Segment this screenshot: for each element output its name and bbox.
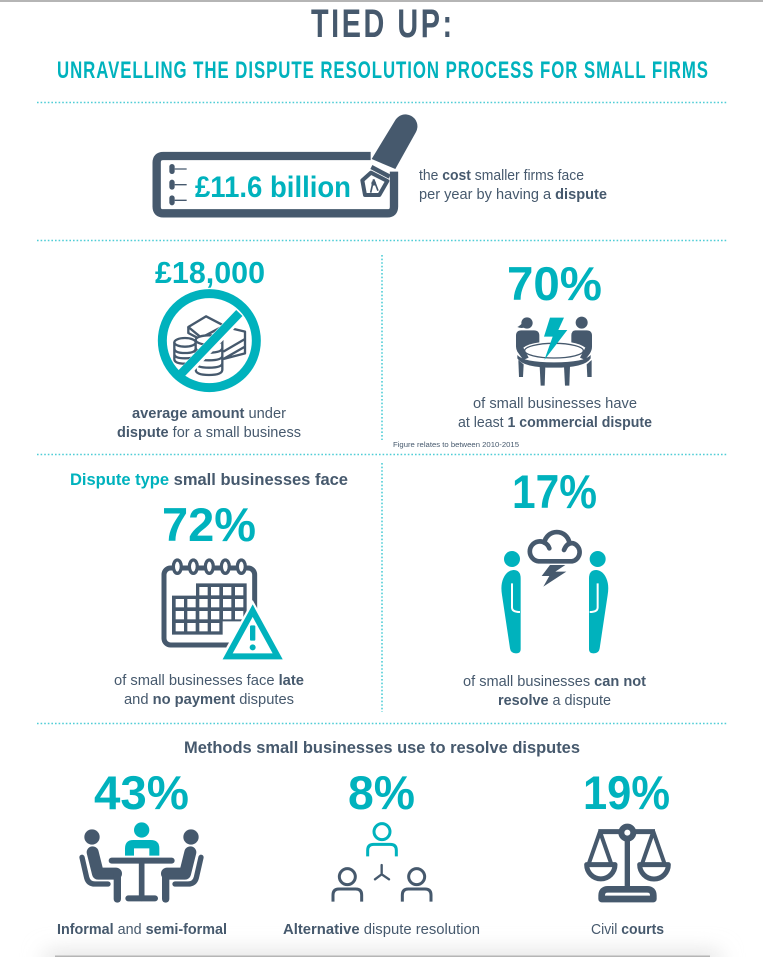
icon: cheque with fountain pen (157, 114, 417, 213)
icon: calendar with warning triangle (164, 560, 287, 662)
stat: 17%: 17% (512, 465, 597, 518)
text: cost description: the cost smaller firms face (419, 167, 584, 184)
text: average amount: dispute for a small business (117, 424, 301, 441)
stat: 19%: 19% (583, 766, 670, 819)
subtitle: UNRAVELLING THE DISPUTE RESOLUTION PROCESS FOR SMALL FIRMS (57, 57, 708, 84)
text: late payment (114, 672, 304, 708)
text: cannot resolve: of small businesses can not (463, 673, 646, 690)
text: commercial dispute (458, 395, 652, 431)
text: late payment: and no payment disputes (124, 691, 294, 708)
heading: methods: Methods small businesses use to resolve disputes (184, 739, 580, 757)
label: civil courts: Civil courts (591, 921, 664, 938)
icon: crossed-out money (162, 294, 256, 388)
icon: two people under a storm cloud (501, 532, 608, 653)
icon: scales of justice (587, 827, 668, 899)
icon: three connected people (333, 824, 431, 902)
text: cost description (419, 167, 607, 203)
footnote: Figure relates to between 2010-2015 (393, 442, 519, 449)
stat: cost amount: £11.6 billion (195, 171, 351, 204)
text: cost description: per year by having a dispute (419, 186, 607, 203)
text: average amount (117, 405, 301, 441)
label: alternative dispute resolution: Alternative dispute resolution (283, 921, 480, 938)
text: commercial dispute: at least 1 commercial dispute (458, 414, 652, 431)
icon: two people arguing at a table (516, 317, 592, 386)
heading: dispute type: Dispute type small businesses face (70, 471, 348, 489)
stat: 18,000: £18,000 (155, 255, 265, 290)
text: commercial dispute: of small businesses have (473, 395, 637, 412)
stat: 70%: 70% (507, 257, 602, 310)
text: average amount: average amount under (132, 405, 286, 422)
text: cannot resolve: resolve a dispute (498, 692, 611, 709)
icon: three people at a meeting table (82, 822, 201, 899)
text: cannot resolve (463, 673, 646, 709)
stat: 72%: 72% (162, 498, 256, 551)
text: late payment: of small businesses face late (114, 672, 304, 689)
stat: 8%: 8% (348, 766, 415, 819)
label: informal: Informal and semi-formal (57, 921, 227, 938)
title: TIED UP: (311, 1, 452, 46)
stat: 43%: 43% (94, 766, 189, 819)
